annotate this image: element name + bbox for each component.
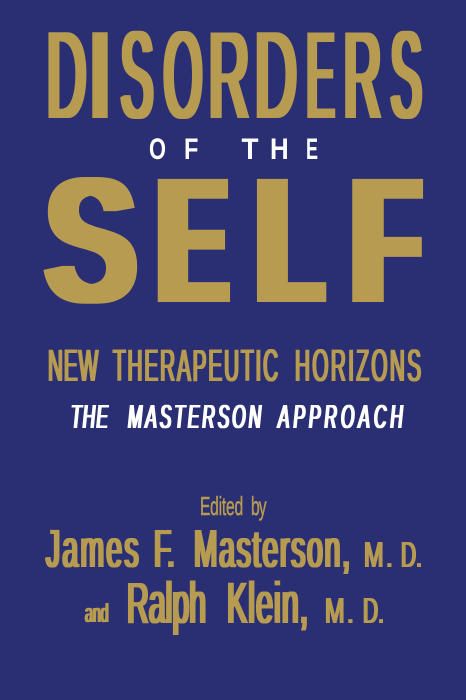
subheading: The Masterson Approach: THE bbox=[71, 398, 108, 436]
text: Edited by: Edited bbox=[200, 492, 243, 521]
subtitle: of the: O bbox=[149, 133, 166, 166]
heading: New Therapeutic Horizons: HORIZONS bbox=[295, 341, 421, 391]
title: Disorders: O bbox=[164, 7, 202, 145]
author: James F. Masterson, M.D.: F. bbox=[154, 519, 175, 580]
author: and Ralph Klein, M.D.: D. bbox=[363, 591, 384, 632]
title: Self bbox=[46, 140, 419, 340]
heading: New Therapeutic Horizons: THERAPEUTIC bbox=[113, 341, 278, 391]
title: Disorders: S bbox=[121, 7, 153, 145]
title: Self: F bbox=[353, 140, 419, 340]
author: and Ralph Klein, M.D.: and bbox=[85, 600, 109, 628]
heading: New Therapeutic Horizons: NEW bbox=[48, 341, 98, 391]
text: Edited by: by bbox=[251, 492, 267, 521]
title: Disorders: D bbox=[47, 7, 86, 145]
author: James F. Masterson, M.D. bbox=[46, 519, 422, 580]
title: Disorders: E bbox=[307, 7, 334, 145]
author: James F. Masterson, M.D.: D. bbox=[401, 535, 422, 576]
title: Self: L bbox=[258, 140, 322, 340]
subheading: The Masterson Approach: APPROACH bbox=[277, 398, 403, 436]
text: Edited by bbox=[200, 492, 267, 521]
subtitle: of the bbox=[149, 133, 318, 166]
title: Disorders: R bbox=[344, 7, 381, 145]
author: James F. Masterson, M.D.: Masterson, bbox=[194, 519, 350, 580]
author: and Ralph Klein, M.D.: Klein, bbox=[227, 570, 308, 636]
author: and Ralph Klein, M.D.: Ralph bbox=[127, 570, 206, 636]
subtitle: of the: T bbox=[242, 133, 258, 166]
title: Disorders: R bbox=[209, 7, 249, 145]
title: Self: S bbox=[46, 140, 136, 340]
author: James F. Masterson, M.D.: M. bbox=[364, 536, 393, 575]
author: and Ralph Klein, M.D.: M. bbox=[325, 592, 354, 631]
title: Self: E bbox=[159, 140, 226, 340]
title: Disorders: I bbox=[86, 7, 114, 145]
subtitle: of the: F bbox=[184, 133, 198, 166]
author: and Ralph Klein, M.D. bbox=[85, 570, 384, 636]
title: Disorders bbox=[47, 7, 421, 145]
title: Disorders: D bbox=[255, 7, 297, 145]
author: James F. Masterson, M.D.: James bbox=[46, 519, 139, 580]
subtitle: of the: H bbox=[270, 133, 289, 166]
subtitle: of the: E bbox=[306, 133, 318, 166]
subheading: The Masterson Approach bbox=[71, 398, 403, 436]
subheading: The Masterson Approach: MASTERSON bbox=[128, 398, 261, 436]
heading: New Therapeutic Horizons bbox=[48, 341, 421, 391]
